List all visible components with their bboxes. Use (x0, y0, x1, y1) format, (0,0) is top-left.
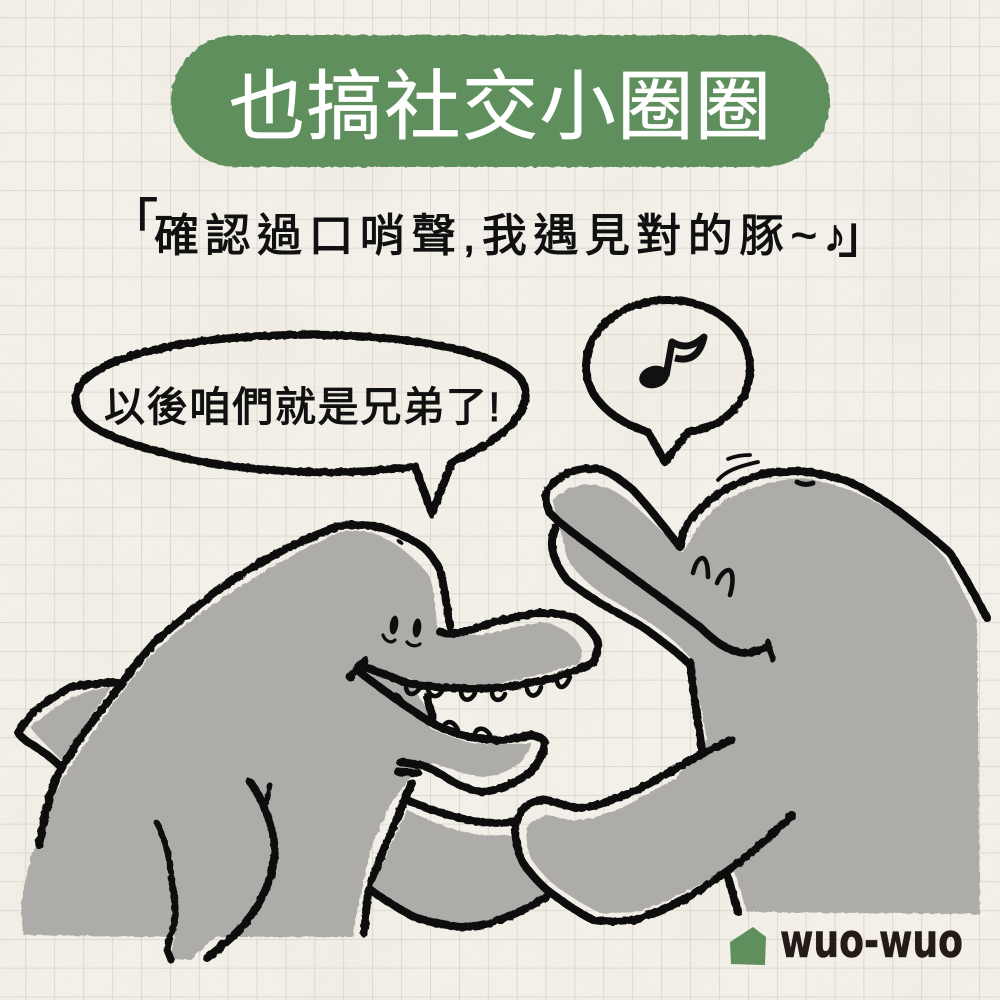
subtitle (108, 195, 888, 263)
speech bubble: music note (586, 300, 750, 462)
outline strokes (18, 525, 598, 960)
logo (730, 914, 963, 968)
flipper behind: band between dolphins (371, 800, 546, 927)
title banner (171, 35, 830, 167)
bubble outline (76, 335, 526, 514)
band fill (371, 810, 546, 927)
subtitle: 」 (838, 207, 888, 263)
eyes (389, 538, 422, 638)
dorsal fin (30, 687, 111, 760)
closed eyes (693, 558, 732, 595)
eye smiles (383, 635, 420, 646)
icon: house (730, 927, 766, 965)
bubble text: 以後咱們就是兄弟了! (104, 384, 500, 430)
body fill (21, 531, 582, 960)
icon: music note (637, 337, 704, 392)
blowhole and motion lines (718, 455, 813, 484)
bubble outline (586, 300, 750, 462)
band outline (371, 800, 546, 927)
dolphin: left (18, 525, 598, 960)
dolphin: right (515, 455, 987, 922)
teeth (392, 677, 570, 735)
speech bubble: brothers (76, 335, 526, 514)
outline strokes (515, 469, 987, 922)
subtitle: 「 (108, 195, 158, 251)
body fill (527, 478, 980, 914)
title text: 也搞社交小圈圈 (229, 65, 771, 150)
subtitle: 確認過口哨聲,我遇見對的豚~♪ (154, 210, 846, 261)
title pill (171, 35, 830, 167)
